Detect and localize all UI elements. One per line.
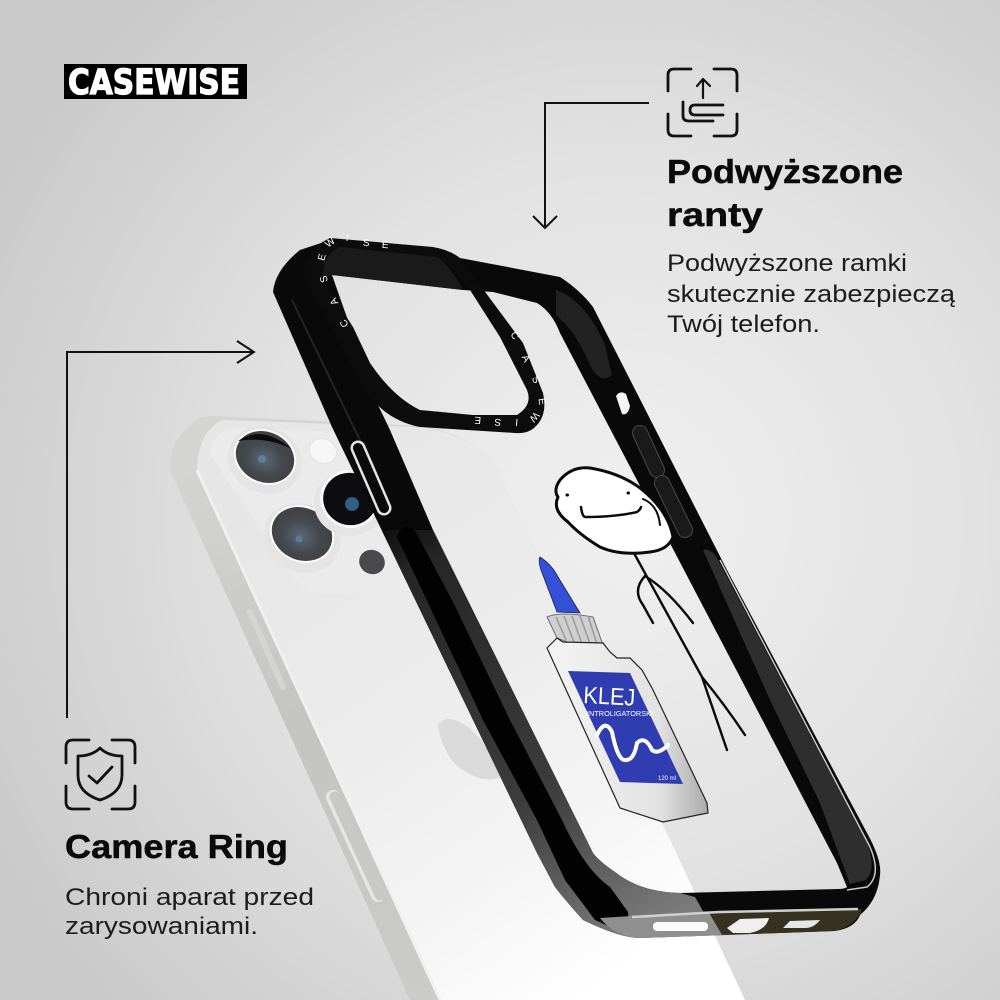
heading: camera ring: Camera Ring xyxy=(65,828,288,865)
heading: raised edges: Podwyższone xyxy=(667,153,903,190)
arrow: camera ring xyxy=(67,341,254,718)
head xyxy=(556,468,673,553)
long slot xyxy=(397,527,628,928)
apple logo xyxy=(438,719,500,779)
top frame seen through ring xyxy=(323,247,463,290)
phone side xyxy=(170,416,745,1000)
heading: raised edges: ranty xyxy=(667,196,764,233)
nozzle xyxy=(539,557,580,613)
text: raised edges description: skutecznie zabezpieczą xyxy=(667,281,956,308)
ring lettering: S xyxy=(318,274,331,284)
lens 1 xyxy=(217,414,313,506)
right button 1 xyxy=(640,433,657,470)
ring lettering: E xyxy=(316,252,329,262)
camera plateau xyxy=(210,428,420,594)
lens 2 xyxy=(252,491,352,585)
cap xyxy=(547,614,603,645)
speaker hole xyxy=(653,922,708,931)
label volume: 120 ml xyxy=(658,776,676,782)
logo: CASEWISE xyxy=(68,63,240,103)
ring lettering: S xyxy=(529,375,542,386)
text: camera ring description: Chroni aparat przed xyxy=(65,884,314,911)
sticker: stick figure xyxy=(556,468,745,750)
ring lettering: W xyxy=(323,235,338,250)
lower side button xyxy=(333,797,380,895)
text: raised edges description: Podwyższone ramki xyxy=(667,250,907,277)
text: camera ring description: zarysowaniami. xyxy=(65,913,258,940)
ring lettering: I xyxy=(345,233,349,244)
sticker: glue bottle xyxy=(539,557,708,822)
mic hole xyxy=(783,920,820,928)
left frame lower part xyxy=(382,530,716,938)
right highlight xyxy=(720,560,875,890)
lens 3 xyxy=(311,460,389,538)
ring lettering: C xyxy=(508,330,521,342)
ring lettering xyxy=(316,233,548,427)
bottom olive band xyxy=(708,909,862,935)
arrow: raised edges xyxy=(533,103,649,228)
body xyxy=(635,555,745,750)
case frame xyxy=(273,240,880,938)
bottom highlight xyxy=(632,909,858,917)
ring lettering: I xyxy=(515,416,519,427)
icon: shield check xyxy=(66,740,135,809)
bottle body xyxy=(547,638,708,822)
left power button xyxy=(358,448,384,508)
upper side button xyxy=(250,612,283,687)
upper right recess xyxy=(556,290,612,378)
phone case xyxy=(273,240,880,938)
ring lettering: S xyxy=(362,238,370,249)
lower right recess xyxy=(703,550,872,884)
label name: KLEJ xyxy=(583,682,636,712)
phone back xyxy=(197,420,745,1000)
eyes and smile xyxy=(567,493,628,495)
usb hole xyxy=(727,918,769,933)
side hole xyxy=(616,392,630,414)
ring lettering: W xyxy=(526,409,541,424)
icon: raised edge xyxy=(668,69,737,136)
ring lettering: E xyxy=(535,397,548,406)
lidar sensor xyxy=(355,546,389,578)
text: raised edges description: Twój telefon. xyxy=(667,311,820,338)
back rim highlight xyxy=(197,470,440,1000)
label wave xyxy=(597,726,668,760)
ring lettering: E xyxy=(474,414,482,425)
bottom edge band xyxy=(600,911,730,938)
ring lettering: S xyxy=(494,416,502,427)
ring lettering: A xyxy=(519,353,532,365)
camera ring xyxy=(304,233,548,433)
ring lettering: E xyxy=(381,240,389,251)
flash xyxy=(305,434,341,468)
bottle label xyxy=(568,671,683,784)
ring body xyxy=(304,238,544,433)
right button 2 xyxy=(662,483,685,530)
phone xyxy=(170,414,745,1000)
ring lettering: C xyxy=(338,317,351,329)
label subtitle: INTROLIGATORSKI xyxy=(587,709,653,718)
outer ridge xyxy=(292,300,372,465)
ring lettering: A xyxy=(328,295,341,307)
